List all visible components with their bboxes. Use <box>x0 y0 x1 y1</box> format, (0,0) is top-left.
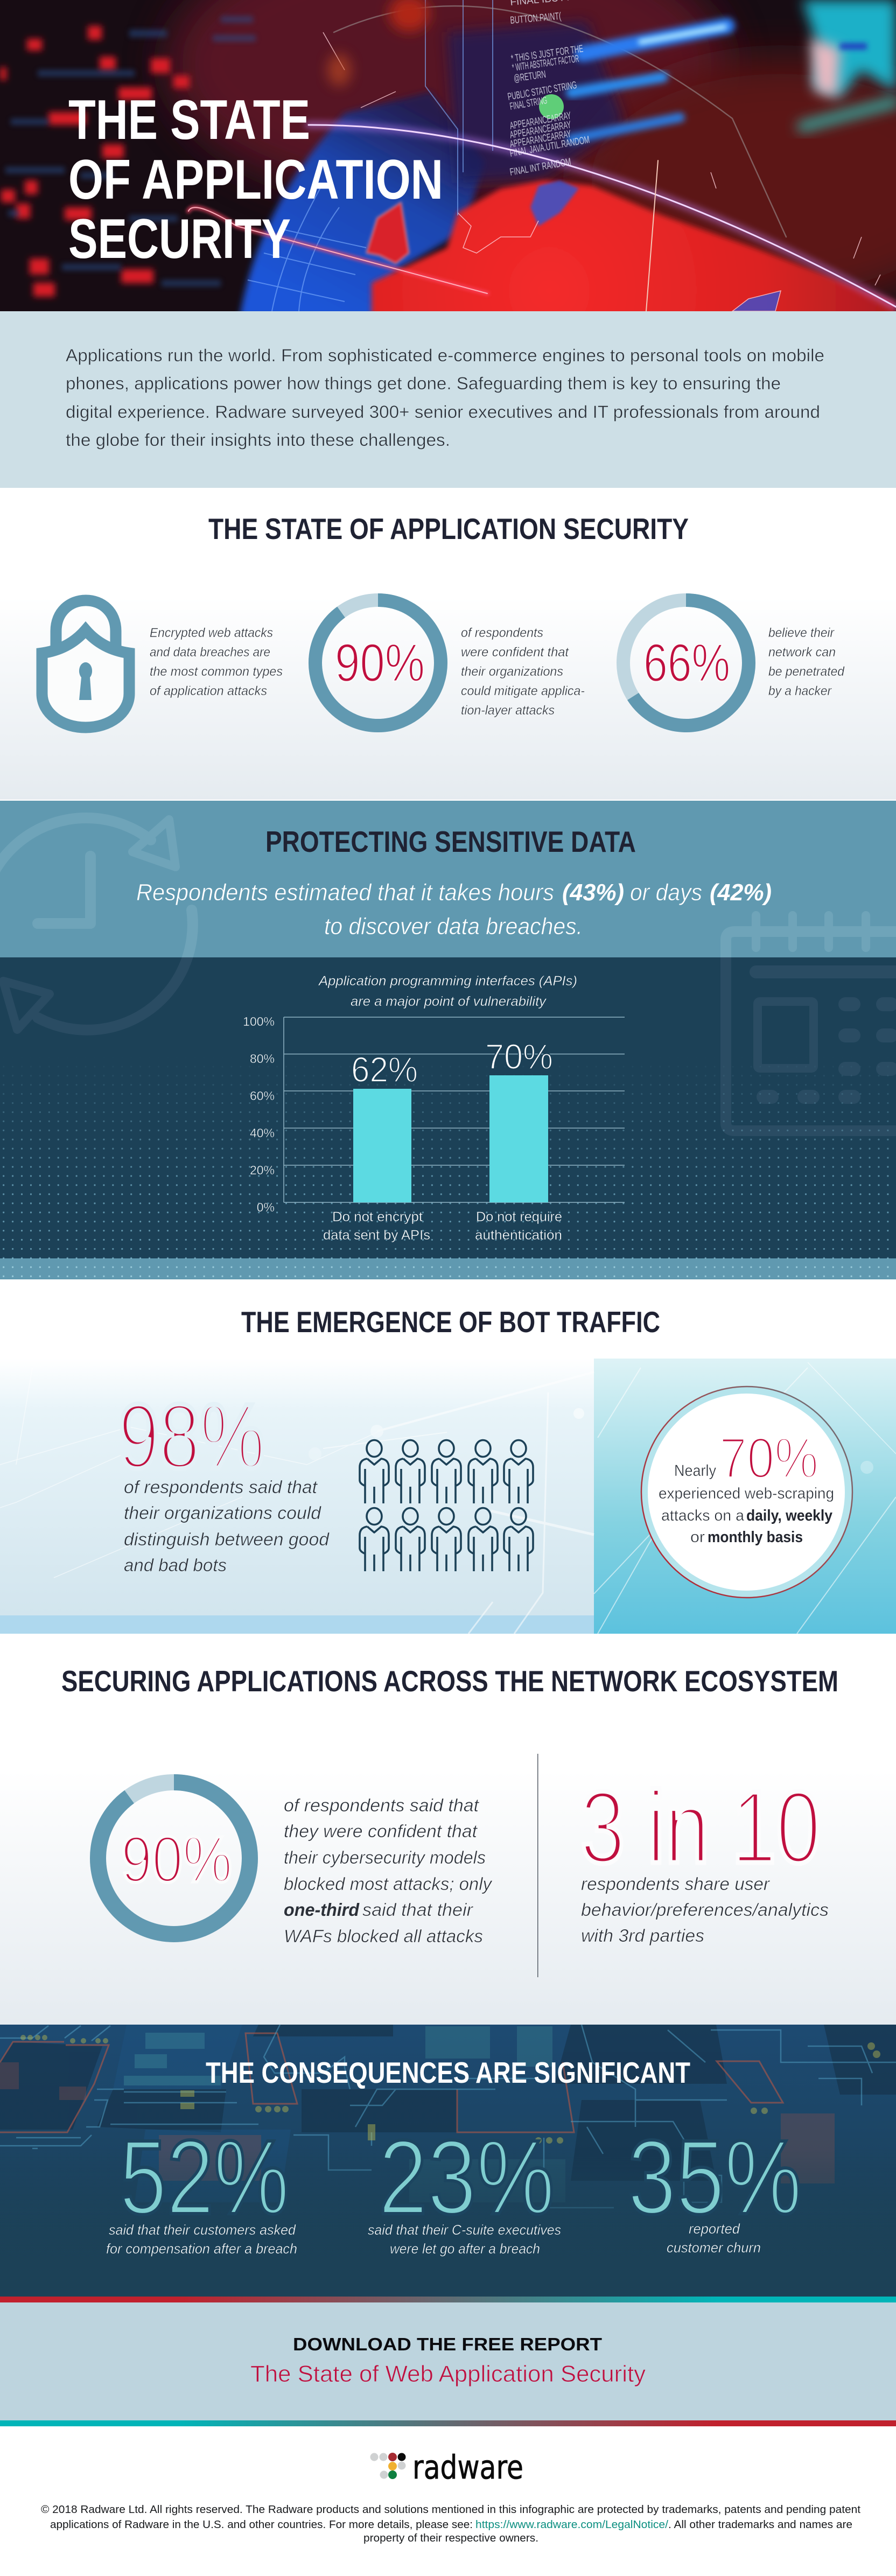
code text in hero: PUBLIC STATIC STRING <box>507 80 578 103</box>
value: 62%: 62% <box>351 1049 418 1089</box>
66% text <box>768 626 845 698</box>
callout: 70% circle: 70% <box>719 1426 818 1490</box>
stat: 52%: for compensation after a breach <box>106 2241 297 2257</box>
stat: 98%: 98% <box>118 1385 265 1488</box>
98% text <box>124 1477 330 1575</box>
y axis labels <box>243 1014 275 1214</box>
footer legal text: . All other trademarks and names are <box>668 2519 852 2531</box>
footer legal text: applications of Radware in the U.S. and other countries. For more details, please see: <box>50 2519 473 2531</box>
blurred data streaks <box>571 26 894 139</box>
value: 70%: 70% <box>485 1037 553 1076</box>
90% text: tion-layer attacks <box>461 703 555 718</box>
y axis labels: 80% <box>250 1052 275 1066</box>
footer legal text <box>41 2504 860 2544</box>
98% text: and bad bots <box>124 1555 227 1575</box>
intro text: digital experience. Radware surveyed 300+ senior executives and IT professionals from around <box>66 402 820 422</box>
heading: THE STATE OF APPLICATION SECURITY <box>208 512 689 545</box>
icon: clock and calendar background, light band <box>0 818 896 1030</box>
lock text: Encrypted web attacks <box>150 626 273 640</box>
category labels: Do not encrypt <box>332 1209 423 1224</box>
90% text: blocked most attacks; only <box>284 1874 493 1894</box>
y axis labels: 20% <box>250 1163 275 1177</box>
3 in 10 text <box>581 1874 829 1945</box>
y axis labels: 40% <box>250 1126 275 1140</box>
category labels <box>323 1209 562 1243</box>
code text in hero: APPEARANCEARRAY <box>509 128 572 150</box>
category labels: Do not require <box>476 1209 562 1224</box>
code text in hero: * WITH ABSTRACT FACTOR <box>512 53 579 74</box>
stat: 35%: customer churn <box>667 2239 761 2256</box>
donut chart: 90%: 90% <box>335 633 425 692</box>
category labels: authentication <box>475 1228 562 1243</box>
3 in 10 text: respondents share user <box>581 1874 771 1894</box>
lock text: of application attacks <box>150 684 267 698</box>
stat: 52%: said that their customers asked <box>109 2222 296 2238</box>
90% text: their cybersecurity models <box>284 1847 486 1867</box>
logo: radware: radware <box>412 2448 523 2487</box>
heading: bot traffic: THE EMERGENCE OF BOT TRAFFIC <box>241 1305 660 1339</box>
chart title: Application programming interfaces (APIs) <box>318 974 577 989</box>
download heading: DOWNLOAD THE FREE REPORT <box>293 2334 602 2354</box>
y axis labels: 0% <box>257 1200 275 1214</box>
intro text: Applications run the world. From sophisticated e-commerce engines to personal tools on mobile <box>66 346 824 365</box>
90% text: their organizations <box>461 664 563 679</box>
divider <box>537 1754 538 1977</box>
title: OF APPLICATION <box>68 149 443 211</box>
lock text: the most common types <box>150 664 283 679</box>
90% text: WAFs blocked all attacks <box>284 1926 483 1946</box>
panel: consequences <box>0 2025 896 2297</box>
panel: intro <box>0 311 896 488</box>
footer legal text: https://www.radware.com/LegalNotice/ <box>475 2519 668 2531</box>
66% text: believe their <box>768 626 835 640</box>
donut chart: 66% <box>624 600 748 726</box>
callout: 70% circle: or <box>690 1529 705 1546</box>
report title: The State of Web Application Security <box>250 2361 646 2387</box>
stat: 52% <box>106 2118 297 2257</box>
code text in hero: * THIS IS JUST FOR THE <box>510 43 584 65</box>
bar: do not require authentication <box>489 1075 548 1202</box>
y axis labels: 100% <box>243 1014 275 1028</box>
icon: logo dots <box>370 2453 406 2479</box>
icon: padlock <box>42 600 129 727</box>
lock text <box>150 626 283 698</box>
90% text: said that their <box>362 1900 474 1920</box>
panel: state of application security <box>0 488 896 800</box>
gridlines <box>284 1017 625 1202</box>
code text in hero <box>507 0 591 178</box>
66% text: network can <box>768 645 836 660</box>
stat: 52%: 52% <box>120 2118 289 2236</box>
subheading: or days <box>630 879 702 906</box>
donut chart: 90%: 90% <box>121 1823 232 1896</box>
stat: 3 in 10: 3 in 10 <box>580 1770 821 1885</box>
stat: 35%: 35% <box>628 2118 802 2236</box>
heading: PROTECTING SENSITIVE DATA <box>265 825 636 858</box>
donut chart: 66%: 66% <box>643 633 730 692</box>
blurred blue code rows <box>5 16 256 286</box>
blurred continent at top right <box>802 0 896 97</box>
3 in 10 text: behavior/preferences/analytics <box>581 1900 829 1920</box>
title: THE STATE <box>68 89 310 151</box>
chart title: are a major point of vulnerability <box>351 994 547 1009</box>
code text in hero: FINAL STRING <box>509 95 548 113</box>
callout: 70% circle: monthly basis <box>708 1529 803 1546</box>
bar chart: APIs <box>243 974 625 1243</box>
subheading: (42%) <box>710 879 772 906</box>
glowing arcs <box>188 6 896 311</box>
intro text: phones, applications power how things get done. Safeguarding them is key to ensuring the <box>66 374 781 393</box>
stat: 23%: 23% <box>379 2118 555 2236</box>
coast outlines <box>323 32 880 311</box>
title: SECURITY <box>68 208 291 270</box>
intro text: the globe for their insights into these challenges. <box>66 430 450 450</box>
panel: bot traffic <box>0 1359 896 1634</box>
globe grid lines <box>248 0 493 311</box>
code text in hero: APPEARANCEARRAY <box>509 119 572 141</box>
subheading: Respondents estimated that it takes hours <box>136 879 554 906</box>
heading: THE CONSEQUENCES ARE SIGNIFICANT <box>206 2056 690 2089</box>
panel: download <box>0 2297 896 2426</box>
90% text: could mitigate applica- <box>461 684 585 698</box>
circuit board background <box>0 2025 896 2297</box>
callout: 70% circle: attacks on a <box>661 1507 745 1524</box>
66% text: by a hacker <box>768 684 832 698</box>
90% text: they were confident that <box>284 1821 478 1841</box>
stat: 23%: said that their C-suite executives <box>368 2222 561 2238</box>
donut chart: 90% <box>98 1782 250 1934</box>
icon: ten people <box>360 1440 533 1571</box>
subheading: to discover data breaches. <box>324 913 583 940</box>
bar: do not encrypt <box>353 1089 411 1202</box>
3 in 10 text: with 3rd parties <box>581 1926 704 1945</box>
code text in hero: FINAL INT RANDOM <box>509 156 572 178</box>
footer legal text: property of their respective owners. <box>363 2532 538 2544</box>
category labels: data sent by APIs <box>323 1228 430 1243</box>
90% text: of respondents said that <box>284 1795 480 1815</box>
90% text: of respondents <box>461 626 543 640</box>
logo: radware <box>370 2448 523 2487</box>
90% text: were confident that <box>461 645 569 660</box>
dot pattern <box>0 957 896 1279</box>
icon: red British Isles <box>366 202 409 264</box>
icon: clock and calendar background, dark band <box>3 910 896 1131</box>
callout: 70% circle: daily, weekly <box>746 1507 832 1524</box>
98% text: distinguish between good <box>124 1529 330 1549</box>
callout: 70% circle: experienced web-scraping <box>659 1485 834 1502</box>
90% text <box>284 1795 493 1946</box>
90% text <box>461 626 585 718</box>
98% text: their organizations could <box>124 1503 322 1523</box>
code text in hero: APPEARANCEARRAY <box>509 110 572 132</box>
stat: 35%: reported <box>689 2221 741 2237</box>
callout: 70% circle: Nearly <box>674 1462 716 1480</box>
panel: hero banner <box>0 0 896 323</box>
panel: securing applications <box>0 1634 896 2025</box>
code text in hero: FINAL JAVA.UTIL.RANDOM <box>509 134 591 159</box>
network lines <box>0 1362 896 1634</box>
lock text: and data breaches are <box>150 645 270 660</box>
title <box>69 100 440 258</box>
stat: 23%: were let go after a breach <box>390 2241 540 2257</box>
subheading <box>136 879 772 940</box>
98% text: of respondents said that <box>124 1477 318 1497</box>
green node <box>539 94 564 119</box>
chart title <box>318 974 577 1009</box>
90% text: one-third <box>284 1900 360 1920</box>
footer legal text: © 2018 Radware Ltd. All rights reserved. The Radware products and solutions mentioned in this infographic are protected by trademarks, patents and pending patent <box>41 2504 860 2516</box>
intro text <box>66 346 824 450</box>
panel: protecting sensitive data <box>0 801 896 1279</box>
code text in hero: @RETURN <box>513 69 547 85</box>
66% text: be penetrated <box>768 664 845 679</box>
glowing node top <box>389 0 430 32</box>
subheading: (43%) <box>562 879 624 906</box>
blurred red code blocks <box>0 26 190 297</box>
callout: 70% circle <box>641 1387 852 1598</box>
code text in hero: BUTTON.PAINT( <box>510 11 562 26</box>
y axis labels: 60% <box>250 1089 275 1103</box>
donut chart: 90% <box>316 600 440 726</box>
